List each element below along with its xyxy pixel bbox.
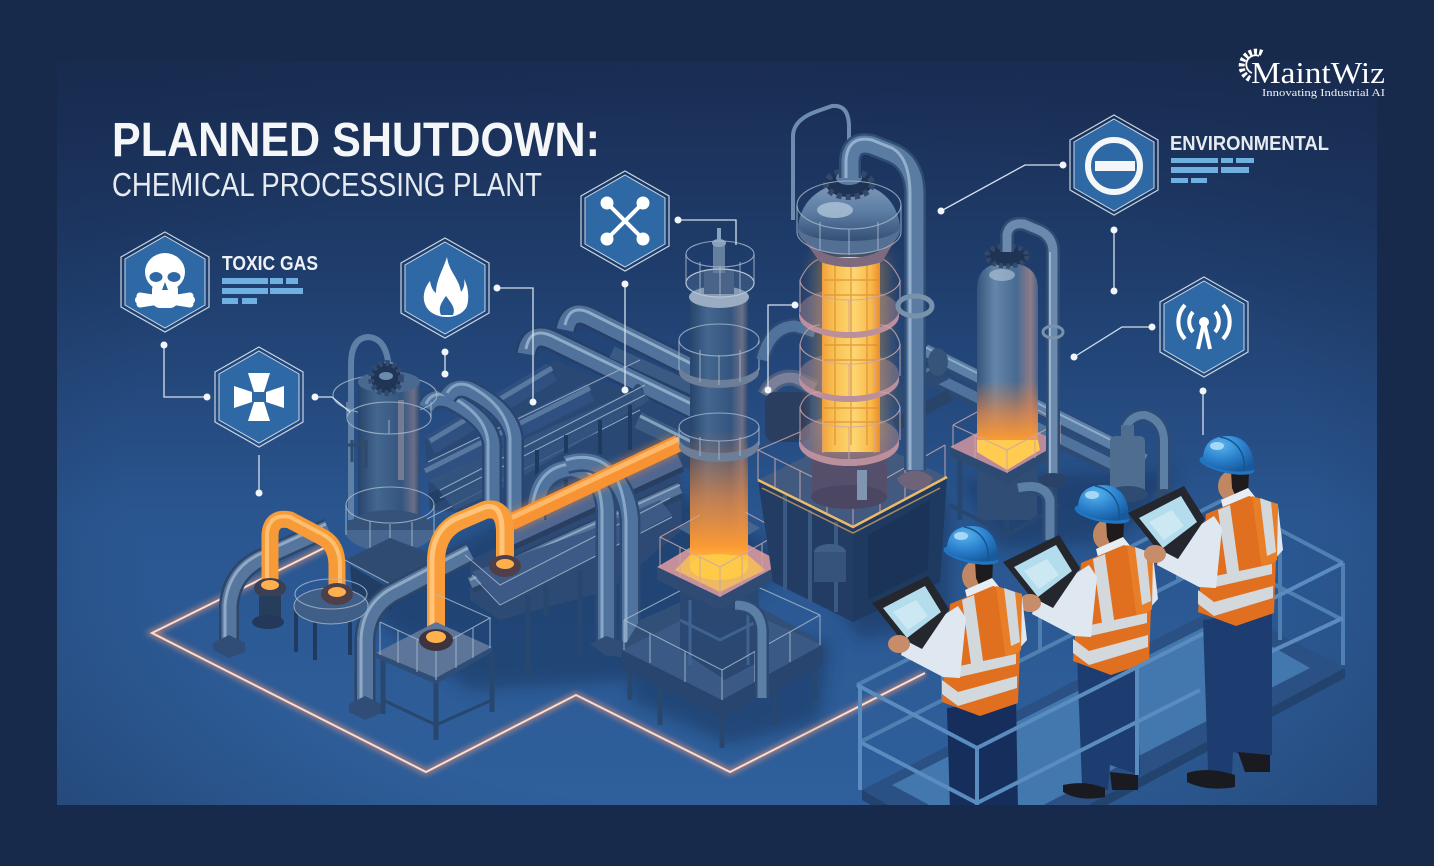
label: environmental xyxy=(1170,133,1329,183)
worker 3 legs and shoes xyxy=(1187,610,1272,789)
logo: MaintWiz: Innovating Industrial AI xyxy=(1262,87,1385,99)
icon: wireless signal hexagon xyxy=(1160,277,1248,377)
right vessel xyxy=(953,246,1060,473)
logo: MaintWiz: MaintWiz xyxy=(1251,55,1385,90)
icon: crossed tools hexagon xyxy=(581,171,669,271)
reactor overhead pipe xyxy=(793,106,933,490)
back arches xyxy=(426,384,514,520)
front arches xyxy=(532,457,640,658)
label: toxic gas: TOXIC GAS xyxy=(222,253,318,275)
glowing safety boundary line xyxy=(152,547,925,772)
ground shadows xyxy=(350,460,1180,745)
rear pipe bank xyxy=(425,310,700,520)
lower gray pipes xyxy=(213,460,682,720)
icon: skull hazard hexagon xyxy=(121,232,209,332)
title: PLANNED SHUTDOWN: xyxy=(112,114,600,167)
left reactor vessel xyxy=(333,337,437,610)
right pipe bank xyxy=(890,347,1145,480)
icon: flame hexagon xyxy=(401,238,489,338)
front safety railing xyxy=(857,563,1343,810)
icon: radiation hexagon xyxy=(215,347,303,447)
worker 2: engineer with tablet xyxy=(1003,485,1158,675)
icon: no-entry environmental hexagon xyxy=(1070,115,1158,215)
connector lines xyxy=(160,162,1206,496)
front-left platform xyxy=(376,594,492,740)
subtitle: CHEMICAL PROCESSING PLANT xyxy=(112,166,542,203)
worker 2 legs and shoes xyxy=(1063,662,1140,799)
mid bend pipes behind reactor xyxy=(762,326,815,442)
upper catwalk and legs xyxy=(428,360,650,510)
main illustration panel xyxy=(57,61,1377,805)
observation deck xyxy=(862,614,1345,805)
right vessel base xyxy=(949,432,1058,540)
back safety railings xyxy=(857,500,1343,742)
mid catwalk and legs xyxy=(465,498,672,678)
label: toxic gas xyxy=(222,253,318,304)
pipe flanges and small vessel xyxy=(252,555,521,660)
orange hot process pipes xyxy=(267,439,679,636)
logo: MaintWiz xyxy=(1242,52,1385,99)
central distillation tower xyxy=(657,228,772,602)
central tower lower platform xyxy=(622,570,822,748)
small vessel and arch pipe xyxy=(1108,415,1174,502)
main glowing reactor xyxy=(799,255,900,509)
worker 1: engineer with tablet xyxy=(872,526,1027,716)
main reactor base structure xyxy=(758,432,947,622)
right vessel overhead pipe xyxy=(1007,224,1067,540)
plant illustration xyxy=(152,106,1345,866)
reactor dome and gear head xyxy=(797,171,901,267)
worker 3: engineer with tablet xyxy=(1128,436,1283,626)
worker 1 legs xyxy=(947,698,1018,810)
label: environmental: ENVIRONMENTAL xyxy=(1170,133,1329,155)
